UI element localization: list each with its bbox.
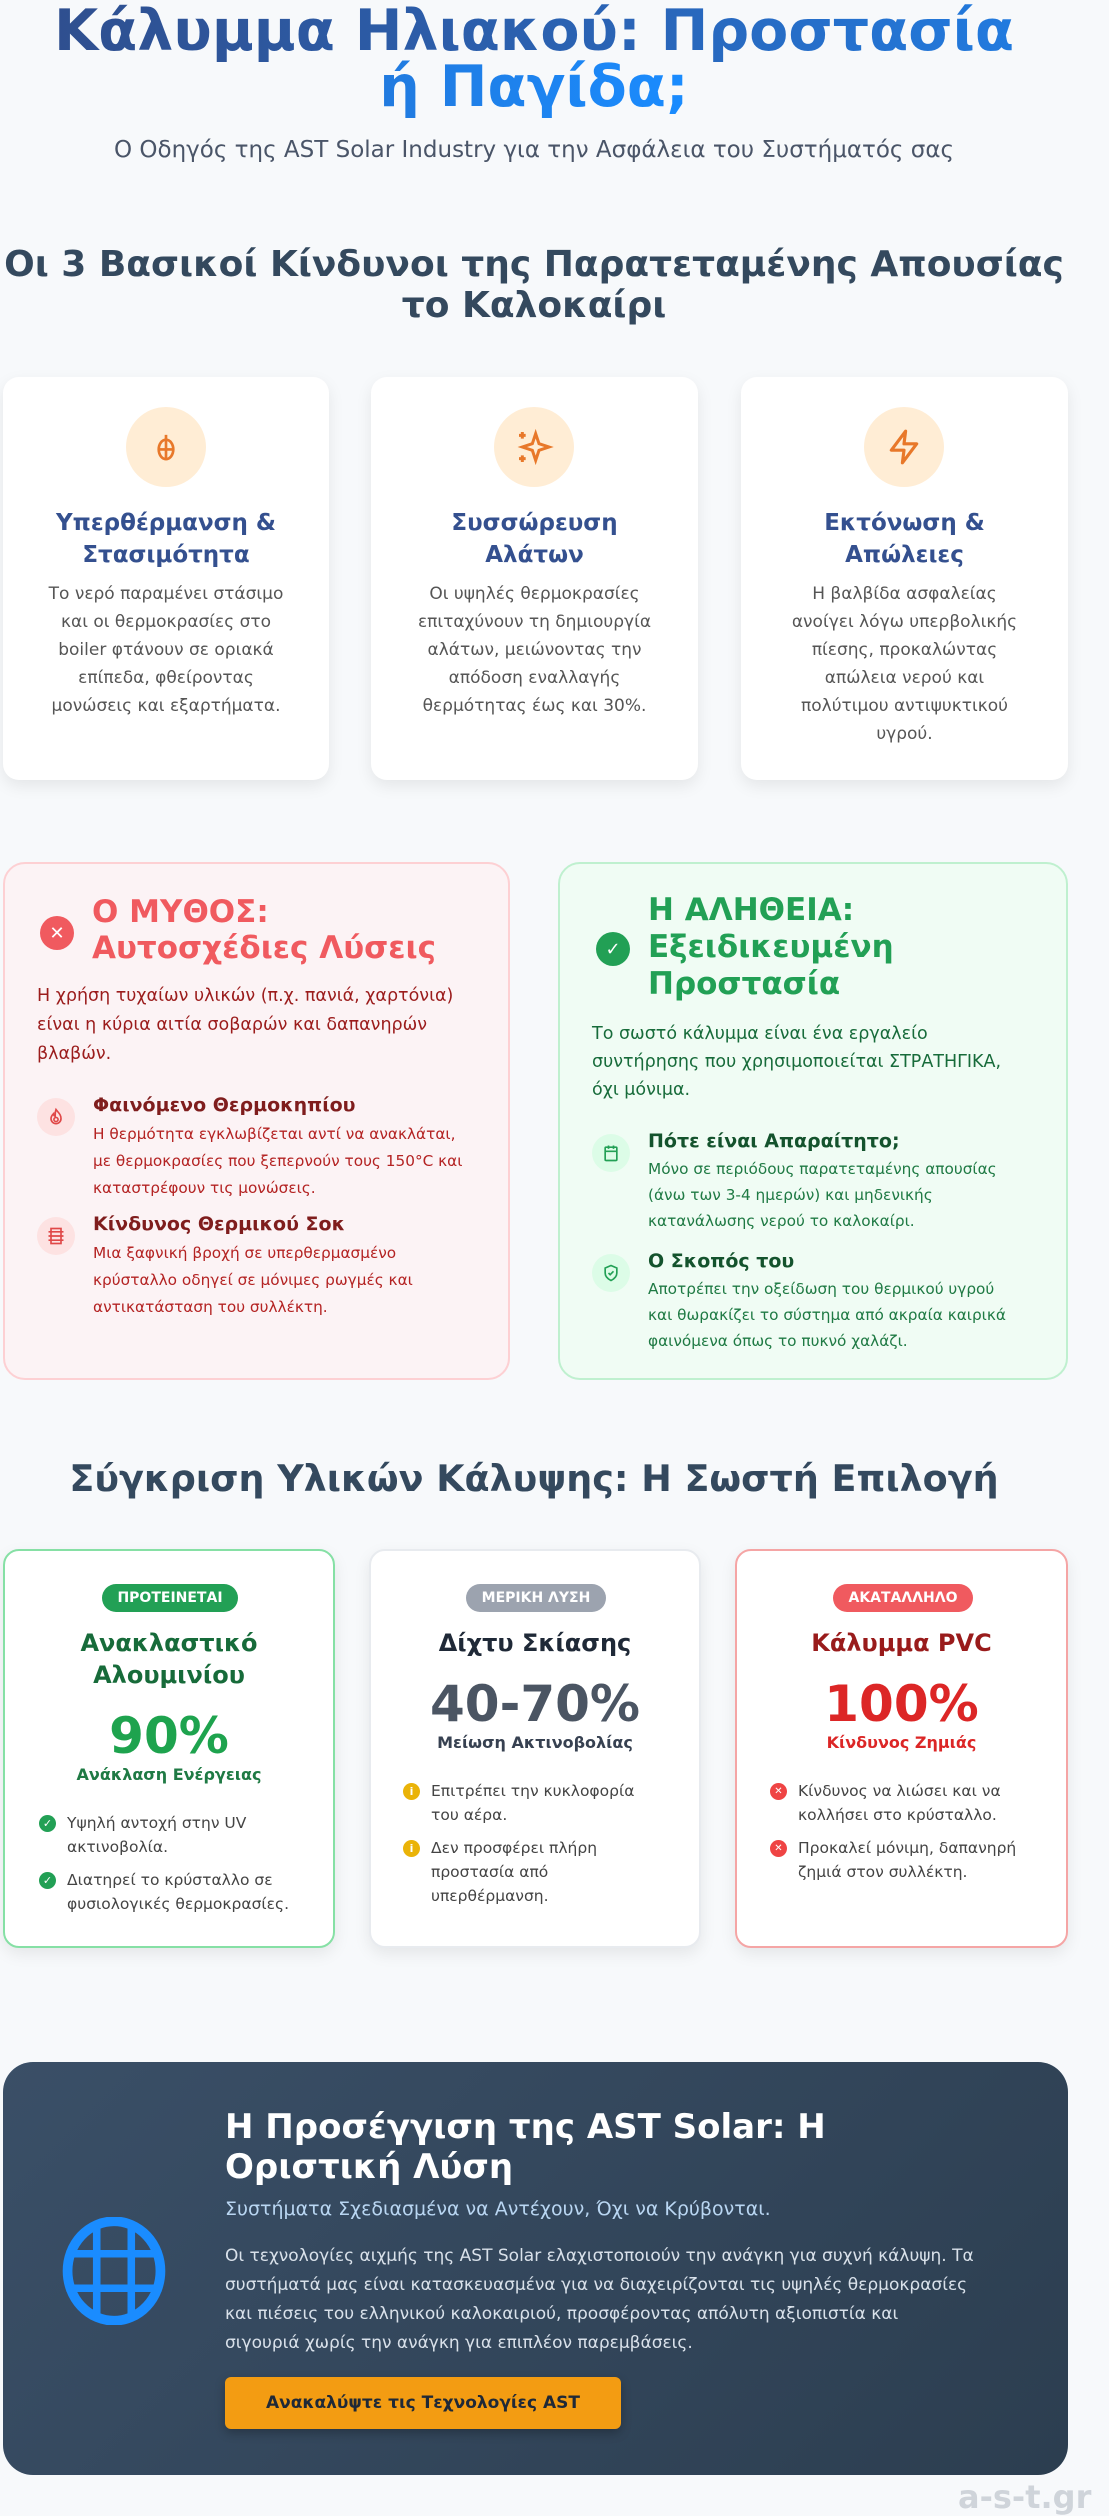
heading: Απώλειες (845, 542, 964, 568)
truth title: Η ΑΛΗΘΕΙΑ: (648, 892, 854, 928)
panel: truth (558, 862, 1068, 1380)
heading (56, 510, 276, 568)
bullets: Επιτρέπει την κυκλοφορία του αέρα. (431, 1782, 634, 1824)
text: Αποτρέπει την οξείδωση του θερμικού υγρού (648, 1280, 994, 1298)
title (54, 0, 1014, 120)
bullets: i (410, 1842, 413, 1855)
panel: risk cards (2, 400, 1069, 787)
myth title: Ο ΜΥΘΟΣ: (92, 894, 269, 930)
text: Μόνο σε περιόδους παρατεταμένης απουσίας (άνω των 3-4 ημερών) και μηδενικής κατανάλωσης νερού το καλοκαίρι. (648, 1160, 997, 1230)
icon: check circle (596, 932, 630, 966)
item: when (592, 1130, 997, 1230)
card: expansion (741, 377, 1068, 780)
title: Κάλυμμα PVC (811, 1629, 992, 1657)
CTA body: και πιέσεις του ελληνικού καλοκαιριού, προσφέροντας απόλυτη αξιοπιστία και (225, 2304, 898, 2324)
CTA body (225, 2246, 974, 2353)
text: και θωρακίζει το σύστημα από ακραία καιρικά φαινόμενα όπως το πυκνό χαλάζι. (648, 1306, 1006, 1350)
icon: calendar (592, 1134, 630, 1172)
heading: Φαινόμενο Θερμοκηπίου (93, 1094, 355, 1116)
item: greenhouse (37, 1094, 462, 1197)
title: Δίχτυ Σκίασης (439, 1629, 631, 1657)
heading (451, 510, 618, 568)
stat label: Μείωση Ακτινοβολίας (437, 1733, 633, 1752)
icon: x circle (40, 916, 74, 950)
badge: ΜΕΡΙΚΗ ΛΥΣΗ (482, 1590, 590, 1606)
heading: Συσσώρευση (451, 510, 618, 536)
bullets: Υψηλή αντοχή στην UV ακτινοβολία. (67, 1814, 246, 1856)
heading: risks: το Καλοκαίρι (402, 285, 666, 326)
bullets (403, 1782, 634, 1905)
heading: Αλάτων (485, 542, 584, 568)
heading: comparison: Σύγκριση Υλικών Κάλυψης: Η Σωστή Επιλογή (69, 1457, 999, 1500)
stat: 100% (824, 1675, 979, 1733)
badge (102, 1584, 238, 1612)
heading: Εκτόνωση & (824, 510, 985, 536)
bullets: Δεν προσφέρει πλήρη προστασία από υπερθέρμανση. (431, 1839, 597, 1905)
text: Μια ξαφνική βροχή σε υπερθερμασμένο κρύσταλλο οδηγεί σε μόνιμες ρωγμές και αντικατάσταση του συλλέκτη. (93, 1244, 413, 1316)
CTA body: Οι τεχνολογίες αιχμής της AST Solar ελαχιστοποιούν την ανάγκη για συχνή κάλυψη. Τα συστήματά μας είναι κατασκευασμένα για να διαχειρίζονται τις υψηλές θερμοκρασίες (225, 2246, 974, 2295)
stat: 90% (109, 1707, 229, 1765)
bullets: ✓ (43, 1817, 52, 1830)
myth text: Η χρήση τυχαίων υλικών (π.χ. πανιά, χαρτόνια) είναι η κύρια αιτία σοβαρών και δαπανηρών βλαβών. (37, 986, 453, 1064)
text: Η βαλβίδα ασφαλείας ανοίγει λόγω υπερβολικής πίεσης, προκαλώντας απώλεια νερού και πολύτιμου αντιψυκτικού υγρού. (792, 584, 1017, 744)
stat: 40-70% (430, 1675, 640, 1733)
bullets: Κίνδυνος να λιώσει και να κολλήσει στο κρύσταλλο. (798, 1782, 1001, 1824)
bullets: ✕ (774, 1786, 783, 1797)
truth title: Εξειδικευμένη (648, 929, 894, 965)
panel: AST CTA (3, 2062, 1068, 2475)
subtitle: Ο Οδηγός της AST Solar Industry για την Ασφάλεια του Συστήματός σας (114, 137, 954, 163)
text: Οι υψηλές θερμοκρασίες επιταχύνουν τη δημιουργία αλάτων, μειώνοντας την απόδοση εναλλαγής θερμότητας έως και 30%. (418, 584, 651, 716)
card: shade net (369, 1549, 701, 1948)
badge (833, 1584, 973, 1612)
stat label: Ανάκλαση Ενέργειας (77, 1765, 261, 1784)
heading (824, 510, 985, 568)
icon: bolt (864, 407, 944, 487)
truth title: Προστασία (648, 966, 840, 1002)
item: thermal shock (37, 1213, 413, 1316)
icon: x circle: ✕ (49, 922, 65, 944)
icon: grid (37, 1217, 75, 1255)
heading: Υπερθέρμανση & (56, 510, 276, 536)
CTA title: Η Προσέγγιση της AST Solar: Η (225, 2107, 826, 2147)
button: Ανακαλύψτε τις Τεχνολογίες AST (266, 2393, 580, 2413)
stat label: Κίνδυνος Ζημιάς (827, 1733, 976, 1752)
title: Αλουμινίου (93, 1661, 245, 1689)
myth title: Αυτοσχέδιες Λύσεις (92, 930, 436, 966)
bullets (770, 1782, 1016, 1881)
title: Ανακλαστικό (80, 1629, 258, 1657)
icon: globe (62, 2217, 166, 2325)
panel: myth (3, 862, 510, 1380)
heading: risks (4, 244, 1064, 326)
bullets: Προκαλεί μόνιμη, δαπανηρή ζημιά στον συλλέκτη. (798, 1839, 1016, 1881)
badge (466, 1584, 606, 1612)
badge: ΠΡΟΤΕΙΝΕΤΑΙ (117, 1590, 223, 1606)
item: purpose (592, 1250, 1006, 1350)
CTA title (225, 2107, 826, 2187)
bullets: ✓ (43, 1874, 52, 1887)
icon: thermometer (126, 407, 206, 487)
panel: comparison cards (2, 1549, 1069, 1955)
button (225, 2377, 621, 2429)
CTA body: σιγουριά χωρίς την ανάγκη για επιπλέον παρεμβάσεις. (225, 2333, 693, 2353)
bullets (39, 1814, 289, 1913)
icon: check circle: ✓ (605, 938, 621, 960)
bullets: i (410, 1785, 413, 1798)
card: PVC (735, 1549, 1068, 1948)
text: Το νερό παραμένει στάσιμο και οι θερμοκρασίες στο boiler φτάνουν σε οριακά επίπεδα, φθείροντας μονώσεις και εξαρτήματα. (49, 584, 283, 716)
watermark: a-s-t.gr (958, 2478, 1091, 2516)
CTA title: Οριστική Λύση (225, 2147, 513, 2187)
card: aluminium (3, 1549, 335, 1948)
heading: Πότε είναι Απαραίτητο; (648, 1130, 900, 1152)
heading: Στασιμότητα (82, 542, 250, 568)
icon: shield (592, 1254, 630, 1292)
heading: Ο Σκοπός του (648, 1250, 794, 1272)
icon: fire (37, 1098, 75, 1136)
title: ή Παγίδα; (379, 54, 689, 120)
title (80, 1629, 258, 1689)
card: overheating (3, 377, 329, 780)
myth title (92, 894, 436, 966)
text: Η θερμότητα εγκλωβίζεται αντί να ανακλάται, με θερμοκρασίες που ξεπερνούν τους 150°C και καταστρέφουν τις μονώσεις. (93, 1125, 462, 1197)
heading: risks: Οι 3 Βασικοί Κίνδυνοι της Παρατεταμένης Απουσίας (4, 244, 1064, 285)
bullets: ✕ (774, 1843, 783, 1854)
heading: Κίνδυνος Θερμικού Σοκ (93, 1213, 345, 1235)
truth title (648, 892, 894, 1002)
text (648, 1280, 1006, 1350)
CTA subtitle: Συστήματα Σχεδιασμένα να Αντέχουν, Όχι να Κρύβονται. (225, 2198, 771, 2220)
bullets: Διατηρεί το κρύσταλλο σε φυσιολογικές θερμοκρασίες. (67, 1871, 289, 1913)
badge: ΑΚΑΤΑΛΛΗΛΟ (848, 1590, 958, 1606)
icon: sparkles (494, 407, 574, 487)
truth text: Το σωστό κάλυμμα είναι ένα εργαλείο συντήρησης που χρησιμοποιείται ΣΤΡΑΤΗΓΙΚΑ, όχι μόνιμα. (592, 1024, 1001, 1100)
card: salts (371, 377, 698, 780)
